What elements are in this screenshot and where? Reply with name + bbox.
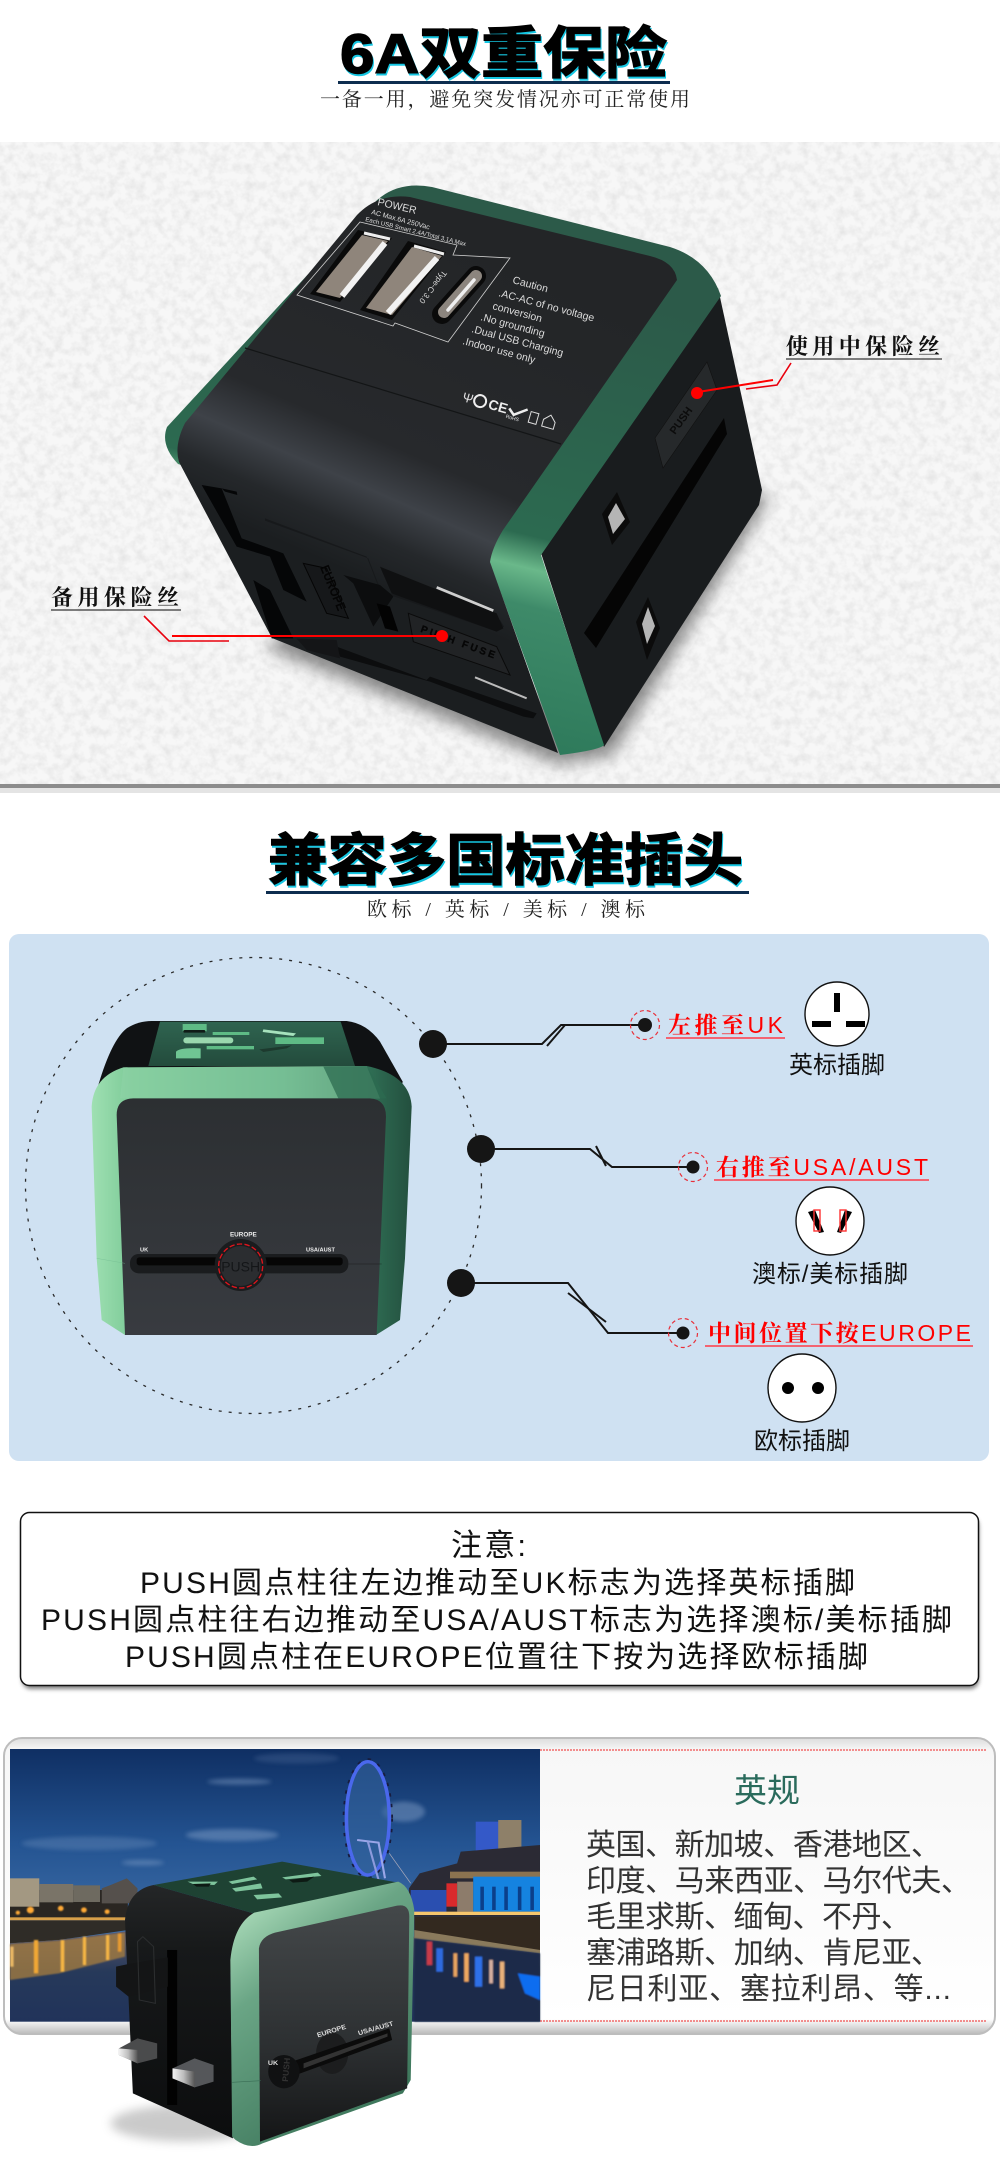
prong 1 <box>602 492 630 545</box>
spec text: Type-C 3.0 <box>417 269 449 306</box>
adapter: front view: PUSH <box>221 1258 260 1274</box>
top plug pin <box>116 1957 168 1997</box>
adapter: UK plug over photo: PUSH <box>280 2057 292 2082</box>
connector: UK <box>419 1010 660 1058</box>
country list: 英国、新加坡、香港地区、 <box>586 1829 941 1862</box>
spec text: .AC-AC of no voltage <box>497 287 596 324</box>
USB port 1 <box>310 230 392 302</box>
slide slot <box>130 1254 348 1273</box>
dotted circle <box>26 958 482 1414</box>
side slot <box>584 418 727 648</box>
divider line <box>245 348 561 444</box>
USB-C port <box>442 276 476 314</box>
subtitle: fuse section: 一备一用，避免突发情况亦可正常使用 <box>320 88 690 111</box>
london eye <box>344 1759 411 1883</box>
adapter: fuse view <box>165 185 762 755</box>
tower <box>476 1822 499 1853</box>
country list: 毛里求斯、缅甸、不丹、 <box>586 1901 911 1934</box>
icon: USA/AUST plug <box>796 1187 864 1255</box>
label: push right to USA/AUST: 右推至USA/AUST <box>716 1154 928 1180</box>
spec text: .No grounding <box>479 311 546 340</box>
adapter: front view <box>92 1021 412 1335</box>
adapter: UK plug over photo <box>111 1862 414 2146</box>
green frame <box>230 1882 414 2146</box>
subtitle: plug standards: 欧标 / 英标 / 美标 / 澳标 <box>367 898 646 921</box>
spec text: Caution <box>511 274 549 295</box>
certification marks: RoHS <box>505 414 520 424</box>
county hall <box>409 1845 540 1917</box>
country list <box>586 1829 971 2006</box>
notice box: 注意: <box>451 1528 526 1563</box>
adapter: fuse view: PUSH <box>668 405 695 437</box>
USB port frame <box>297 222 510 342</box>
panel: plug selector <box>9 934 989 1461</box>
socket face details: PUSH FUSE <box>419 624 497 661</box>
icon: UK plug <box>805 982 869 1046</box>
slider labels: EUROPE <box>230 1232 257 1239</box>
reflections <box>414 1938 540 2022</box>
spec text: POWER <box>376 196 418 217</box>
country list: 尼日利亚、塞拉利昂、等... <box>586 1973 951 2006</box>
spec text: .Indoor use only <box>461 335 537 366</box>
callout: fuse in use <box>691 334 942 399</box>
spec text: Each USB Smart 2.4A/Total 3.1A Max <box>365 216 468 248</box>
certification marks <box>460 388 557 433</box>
spec text: AC Max.6A 250Vac <box>370 209 431 232</box>
heading: UK regulation: 英规 <box>734 1772 800 1809</box>
panel: textured background with adapter <box>0 142 1000 786</box>
spec text: conversion <box>491 300 544 325</box>
notice box: PUSH圆点柱往左边推动至UK标志为选择英标插脚 <box>140 1567 855 1600</box>
photo: London night scene <box>10 1749 540 2022</box>
prong 2 <box>172 2058 214 2087</box>
spec text <box>365 196 596 366</box>
green frame <box>165 185 721 755</box>
shadow under adapter <box>266 480 768 764</box>
icon: EU plug <box>768 1354 836 1422</box>
adapter: UK plug over photo: UK <box>268 2060 278 2067</box>
callout: fuse in use: 使用中保险丝 <box>786 334 940 359</box>
socket face details <box>202 485 537 718</box>
river <box>10 1932 540 2022</box>
slider <box>316 2033 348 2074</box>
right face <box>541 288 762 747</box>
adapter: UK plug over photo: EUROPE <box>316 2024 348 2039</box>
notice box: PUSH圆点柱往右边推动至USA/AUST标志为选择澳标/美标插脚 <box>41 1604 952 1637</box>
main face <box>177 196 677 753</box>
adapter: UK plug over photo: USA/AUST <box>357 2021 395 2037</box>
top face <box>154 1862 398 1913</box>
USB port 2 <box>360 241 446 320</box>
dashed rules <box>540 1749 987 1751</box>
title: 6A dual fuse: 6A双重保险 <box>340 22 667 85</box>
slider labels <box>140 1232 335 1254</box>
label: push left to UK: 左推至UK <box>668 1012 784 1038</box>
panel: UK regulation <box>4 1738 995 2146</box>
connector: USA/AUST <box>467 1135 708 1182</box>
certification marks: Ψ <box>461 389 475 407</box>
socket face details: EUROPE <box>317 563 349 613</box>
PUSH fuse tab <box>655 362 717 468</box>
spec text: .Dual USB Charging <box>470 323 565 359</box>
callout: backup fuse: 备用保险丝 <box>51 585 179 610</box>
prong 2 <box>636 597 660 660</box>
callout: backup fuse <box>51 585 448 642</box>
slider labels: UK <box>140 1248 149 1254</box>
left slot <box>167 1950 177 2105</box>
notice box: PUSH圆点柱在EUROPE位置往下按为选择欧标插脚 <box>125 1641 868 1674</box>
front panel <box>259 1905 409 2142</box>
slider labels: USA/AUST <box>306 1248 335 1254</box>
label: UK pin: 英标插脚 <box>789 1052 885 1079</box>
country list: 印度、马来西亚、马尔代夫、 <box>586 1865 971 1898</box>
shadow <box>111 2105 261 2142</box>
clouds <box>21 1753 425 1865</box>
label: press down for EUROPE: 中间位置下按EUROPE <box>708 1320 971 1346</box>
connector: EUROPE <box>447 1269 698 1348</box>
country list: 塞浦路斯、加纳、肯尼亚、 <box>586 1937 941 1970</box>
left face <box>125 1885 254 2138</box>
left skyline <box>10 1890 128 1920</box>
socket holes <box>176 1024 324 1058</box>
PUSH button <box>221 1246 261 1286</box>
certification marks: CE <box>487 396 510 417</box>
notice box <box>20 1512 979 1689</box>
label: USA/AUST pin: 澳标/美标插脚 <box>752 1261 908 1288</box>
prong 1 <box>119 2038 157 2063</box>
label: EU pin: 欧标插脚 <box>754 1428 850 1455</box>
title: multi-country plugs: 兼容多国标准插头 <box>268 829 743 892</box>
